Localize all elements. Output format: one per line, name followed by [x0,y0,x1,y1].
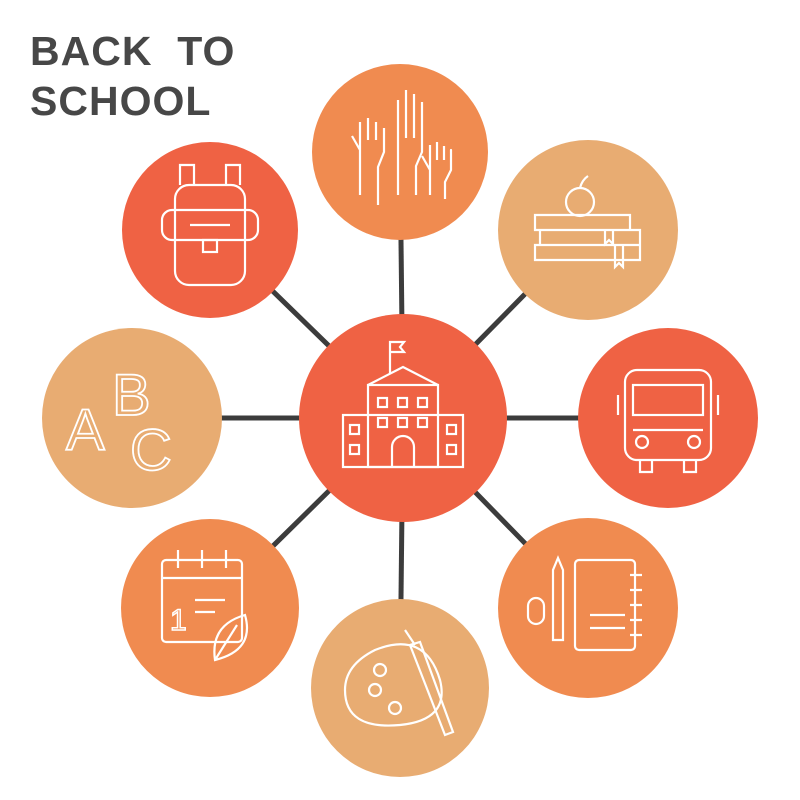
circle: notebook [498,518,678,698]
title: BACK TO [30,28,235,74]
circle: ABC: B [112,363,151,428]
circle: ABC [42,328,222,508]
circle: books and apple [498,140,678,320]
circle: calendar [121,519,299,697]
connector lines [132,152,668,688]
circle: hands [312,64,488,240]
circle: palette [311,599,489,777]
circle: ABC: C [130,418,172,483]
circle: calendar: 1 [170,604,187,637]
circle: ABC: A [66,398,105,463]
circle: center school [299,314,507,522]
circle: backpack [122,142,298,318]
title [30,28,235,124]
circle: bus [578,328,758,508]
title: SCHOOL [30,78,211,124]
